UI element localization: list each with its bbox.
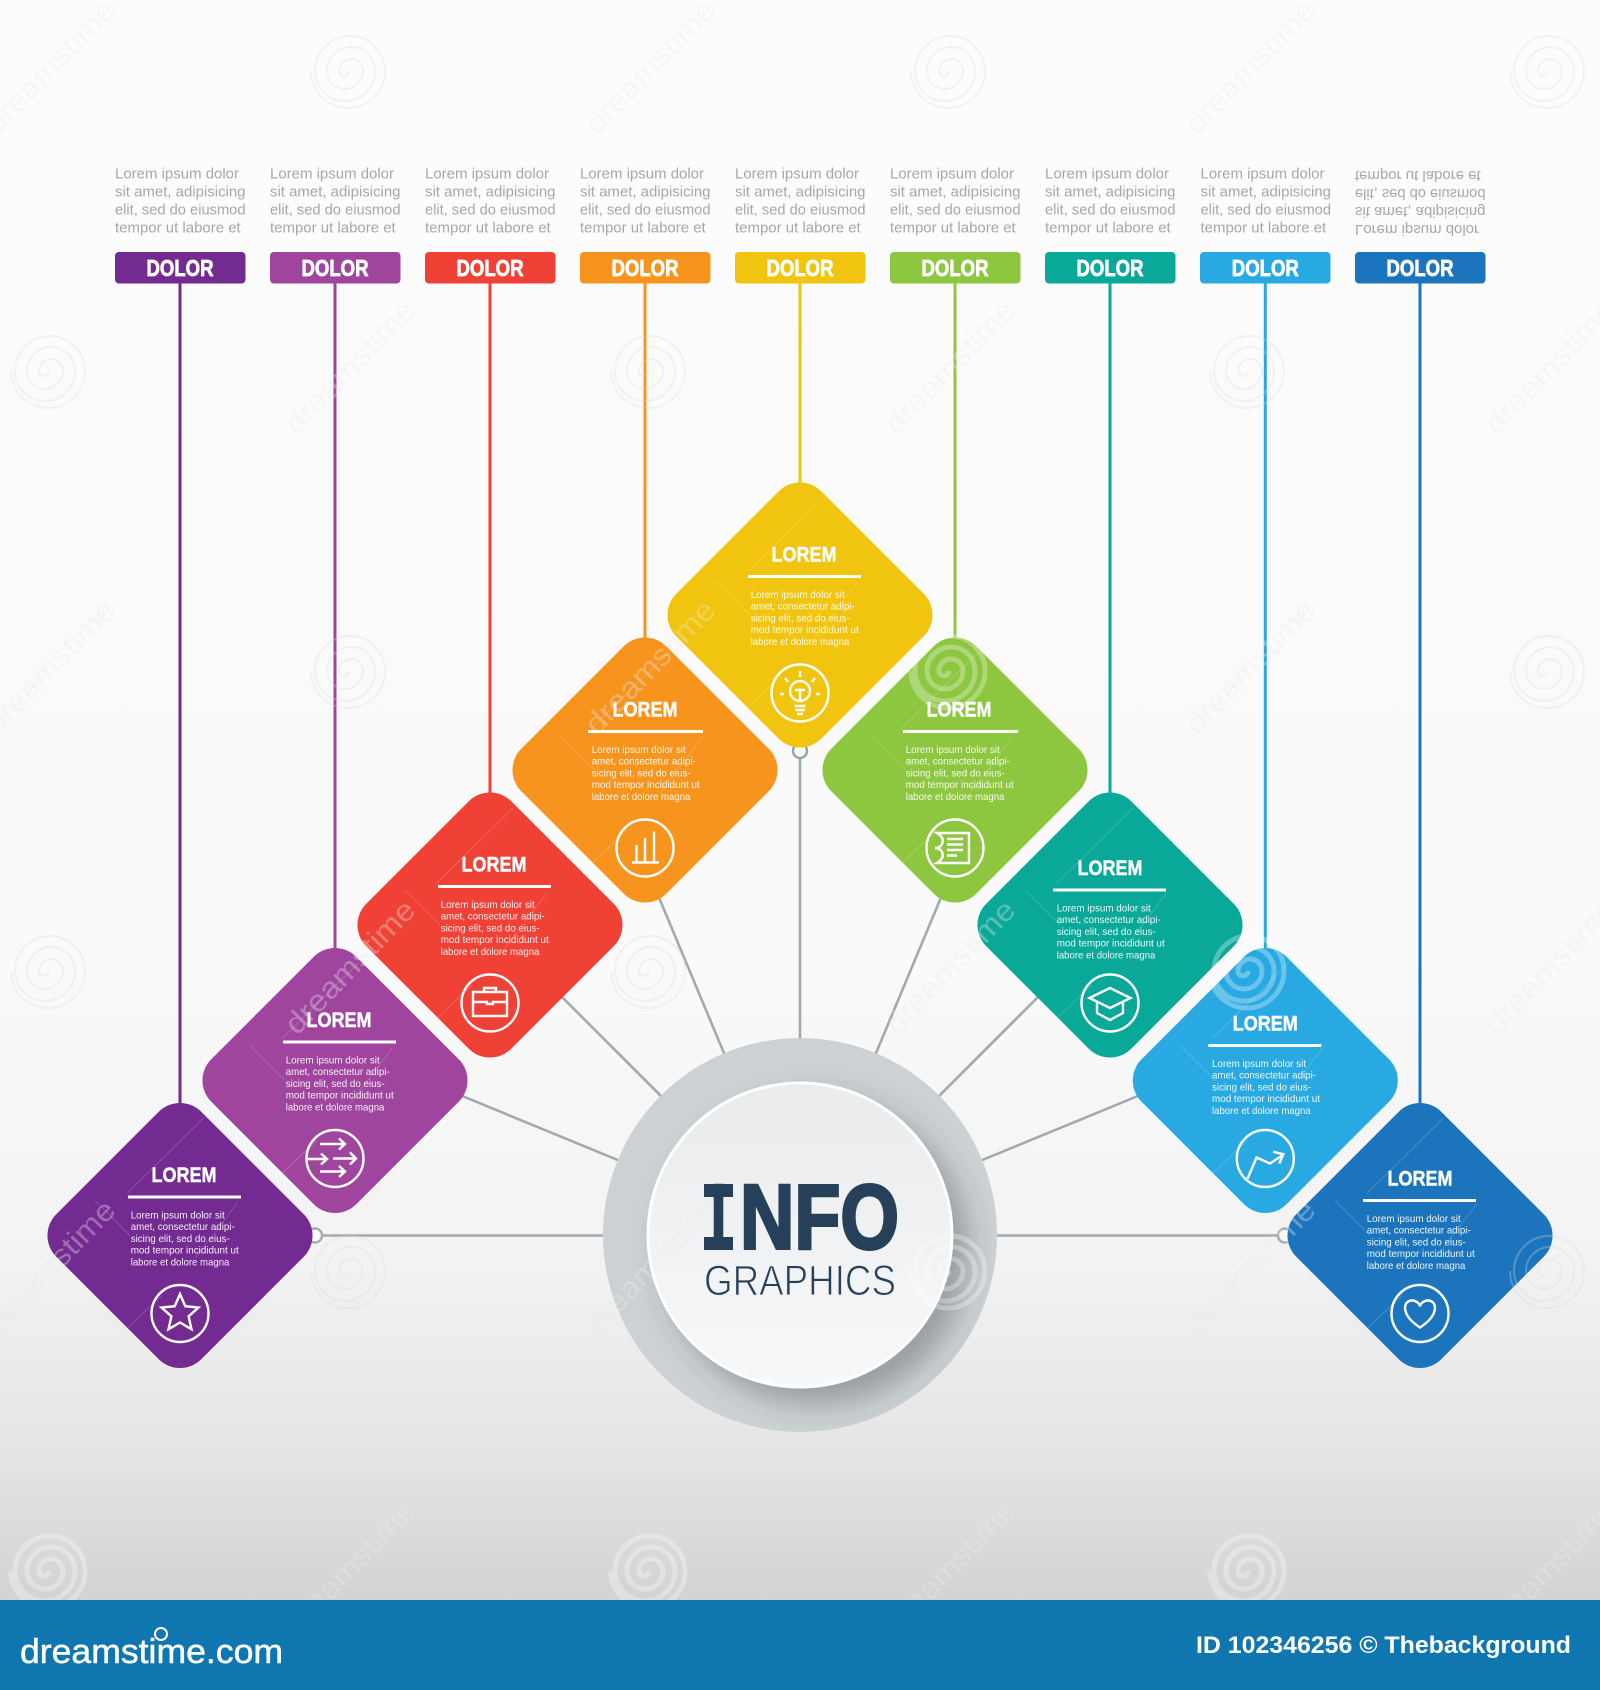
- watermark text: dreamstime: [278, 1494, 422, 1641]
- label: DOLOR: [1076, 255, 1144, 281]
- body text: Lorem ipsum dolor sit: [906, 744, 1000, 756]
- body text: amet, consectetur adipi-: [592, 756, 696, 768]
- body text: labore et dolore magna: [1057, 950, 1156, 962]
- body text: labore et dolore magna: [131, 1256, 230, 1268]
- panel: red diamond: [345, 780, 635, 1070]
- body text: amet, consectetur adipi-: [441, 911, 545, 923]
- top text: elit, sed do eiusmod: [890, 202, 1020, 218]
- top text: tempor ut labore et: [1200, 220, 1326, 236]
- body text: sicing elit, sed do eius-: [906, 767, 1005, 779]
- footer credit: ID 102346256 © Thebackground: [1196, 1632, 1571, 1659]
- top text: sit amet, adipisicing: [890, 184, 1020, 200]
- top text: sit amet, adipisicing: [115, 184, 246, 200]
- watermark text: dreamstime: [878, 894, 1022, 1041]
- body text: sicing elit, sed do eius-: [1212, 1081, 1311, 1093]
- top text: Lorem ipsum dolor: [735, 166, 859, 182]
- top text: elit, sed do eiusmod: [735, 202, 866, 218]
- label: DOLOR: [302, 255, 369, 281]
- body text: sicing elit, sed do eius-: [1367, 1236, 1466, 1248]
- column 8: sky blue: [1200, 166, 1331, 953]
- top text: sit amet, adipisicing: [735, 184, 866, 200]
- stem: [334, 283, 336, 953]
- body text: mod tempor incididunt ut: [1367, 1248, 1475, 1260]
- panel: sky blue diamond: [1120, 936, 1410, 1225]
- body text: mod tempor incididunt ut: [1212, 1093, 1320, 1105]
- icon: bar chart: [616, 820, 674, 876]
- label: [1045, 252, 1176, 284]
- body text: labore et dolore magna: [751, 636, 850, 648]
- stem: [1108, 283, 1112, 798]
- watermark text: dreamstime: [878, 1494, 1022, 1641]
- watermark text: dreamstime: [278, 294, 422, 441]
- connector dot top: [793, 744, 807, 758]
- top text: sit amet, adipisicing: [270, 184, 400, 200]
- top text: Lorem ipsum dolor: [115, 166, 239, 182]
- connector lines to center: [300, 740, 1300, 1236]
- body text: amet, consectetur adipi-: [286, 1066, 390, 1078]
- icon: heart: [1392, 1285, 1448, 1342]
- body text: labore et dolore magna: [906, 791, 1005, 803]
- top text: elit, sed do eiusmod: [580, 202, 710, 218]
- label: DOLOR: [922, 255, 989, 281]
- body text: amet, consectetur adipi-: [906, 756, 1010, 768]
- icon: growth arrow: [1237, 1130, 1294, 1187]
- top text: Lorem ipsum dolor: [1200, 166, 1325, 182]
- icon: briefcase: [462, 974, 518, 1032]
- title: INFO: NFO: [740, 1166, 899, 1268]
- body text: mod tempor incididunt ut: [751, 624, 859, 636]
- icon: light bulb: [772, 664, 828, 722]
- body text: labore et dolore magna: [1367, 1260, 1466, 1272]
- label: [735, 252, 866, 284]
- watermark text: dreamstime: [278, 894, 422, 1041]
- top text: sit amet, adipisicing: [1200, 184, 1331, 200]
- label: DOLOR: [612, 255, 679, 281]
- top text: Lorem ipsum dolor: [425, 166, 549, 182]
- panel: green diamond: [810, 625, 1100, 915]
- watermark text: dreamstime: [878, 294, 1022, 441]
- body text: Lorem ipsum dolor sit: [131, 1210, 225, 1222]
- body text: amet, consectetur adipi-: [751, 601, 855, 613]
- label: [1355, 252, 1486, 284]
- top text: tempor ut labore et: [270, 220, 396, 236]
- footer bar: [0, 1600, 1600, 1690]
- body text: sicing elit, sed do eius-: [1057, 926, 1156, 938]
- column 5: yellow: [735, 166, 866, 488]
- flipped top text: elit, sed do eiusmod: [1355, 185, 1486, 201]
- top text: Lorem ipsum dolor: [270, 166, 394, 182]
- flipped top text: sit amet, adipisicing: [1355, 203, 1486, 219]
- body text: mod tempor incididunt ut: [131, 1245, 239, 1257]
- body text: labore et dolore magna: [441, 946, 540, 958]
- stem: [1418, 283, 1422, 1108]
- title: GRAPHICS: GRAPHICS: [704, 1257, 896, 1305]
- label: [270, 252, 400, 284]
- watermark text: dreamstime: [1178, 1194, 1322, 1341]
- body text: amet, consectetur adipi-: [131, 1221, 235, 1233]
- heading: LOREM: [1388, 1166, 1452, 1190]
- panel: purple diamond: [35, 1091, 325, 1380]
- heading: LOREM: [152, 1163, 216, 1187]
- stem: [954, 283, 956, 643]
- stem: [178, 283, 182, 1108]
- label: DOLOR: [1386, 255, 1454, 281]
- top text: elit, sed do eiusmod: [270, 202, 400, 218]
- label: [1200, 252, 1330, 284]
- icon: graduation cap: [1082, 974, 1138, 1032]
- watermark text: dreamstime: [578, 1194, 722, 1341]
- watermark text: dreamstime: [578, 0, 722, 141]
- connector dot right: [1278, 1228, 1292, 1242]
- connector dot left: [308, 1228, 322, 1242]
- body text: sicing elit, sed do eius-: [286, 1078, 385, 1090]
- label: [580, 252, 710, 284]
- column 1: purple: [115, 166, 246, 1108]
- top text: Lorem ipsum dolor: [580, 166, 704, 182]
- top text: elit, sed do eiusmod: [1045, 202, 1176, 218]
- body text: Lorem ipsum dolor sit: [1057, 902, 1151, 914]
- top text: tempor ut labore et: [580, 220, 706, 236]
- body text: mod tempor incididunt ut: [286, 1090, 394, 1102]
- watermark text: dreamstime: [1178, 0, 1322, 141]
- column 9: blue: [1355, 167, 1486, 1108]
- body text: sicing elit, sed do eius-: [441, 922, 540, 934]
- top text: elit, sed do eiusmod: [1200, 202, 1331, 218]
- body text: Lorem ipsum dolor sit: [286, 1054, 380, 1066]
- panel: orange diamond: [500, 625, 790, 915]
- footer logo spiral: [155, 1628, 167, 1640]
- body text: Lorem ipsum dolor sit: [441, 899, 535, 911]
- top text: elit, sed do eiusmod: [115, 202, 246, 218]
- flipped top text: tempor ut labore et: [1355, 167, 1481, 183]
- icon: arrows: [306, 1130, 364, 1187]
- column 2: violet: [270, 166, 400, 953]
- top text: sit amet, adipisicing: [580, 184, 710, 200]
- center circle: [603, 1038, 997, 1432]
- label: DOLOR: [456, 255, 524, 281]
- column 4: orange: [580, 166, 710, 643]
- watermark text: dreamstime: [1178, 594, 1322, 741]
- body text: mod tempor incididunt ut: [906, 779, 1014, 791]
- stem: [1264, 283, 1267, 953]
- body text: Lorem ipsum dolor sit: [592, 744, 686, 756]
- stem: [488, 283, 492, 798]
- panel: yellow diamond: [655, 470, 945, 760]
- footer logo: dreamstime.com: [20, 1633, 283, 1671]
- heading: LOREM: [612, 698, 678, 722]
- body text: sicing elit, sed do eius-: [592, 767, 691, 779]
- body text: amet, consectetur adipi-: [1212, 1070, 1316, 1082]
- label: DOLOR: [146, 255, 214, 281]
- column 7: teal: [1045, 166, 1176, 798]
- body text: Lorem ipsum dolor sit: [1367, 1213, 1461, 1225]
- icon: document scroll: [926, 820, 984, 876]
- heading: LOREM: [462, 853, 526, 877]
- panel: violet diamond: [190, 936, 480, 1225]
- top text: tempor ut labore et: [735, 220, 861, 236]
- top text: Lorem ipsum dolor: [1045, 166, 1169, 182]
- label: DOLOR: [766, 255, 834, 281]
- body text: Lorem ipsum dolor sit: [1212, 1058, 1306, 1070]
- label: [425, 252, 556, 284]
- top text: elit, sed do eiusmod: [425, 202, 556, 218]
- icon: star: [152, 1285, 208, 1342]
- watermark text: dreamstime: [578, 594, 722, 741]
- top text: sit amet, adipisicing: [1045, 184, 1176, 200]
- panel: blue diamond: [1275, 1091, 1565, 1380]
- heading: LOREM: [1078, 856, 1142, 880]
- heading: LOREM: [926, 698, 992, 722]
- label: [890, 252, 1020, 284]
- top text: tempor ut labore et: [1045, 220, 1171, 236]
- stem: [644, 283, 646, 643]
- panel: teal diamond: [965, 780, 1255, 1070]
- I slab top: [704, 1184, 733, 1197]
- title: INFO: I: [711, 1166, 726, 1268]
- stem: [798, 283, 802, 488]
- top text: Lorem ipsum dolor: [890, 166, 1014, 182]
- flipped top text: Lorem ipsum dolor: [1355, 221, 1479, 237]
- label: DOLOR: [1232, 255, 1299, 281]
- body text: mod tempor incididunt ut: [1057, 938, 1165, 950]
- heading: LOREM: [772, 543, 836, 567]
- body text: mod tempor incididunt ut: [592, 779, 700, 791]
- body text: Lorem ipsum dolor sit: [751, 589, 845, 601]
- body text: sicing elit, sed do eius-: [131, 1233, 230, 1245]
- body text: labore et dolore magna: [592, 791, 691, 803]
- top text: sit amet, adipisicing: [425, 184, 556, 200]
- body text: labore et dolore magna: [1212, 1105, 1311, 1117]
- body text: amet, consectetur adipi-: [1367, 1225, 1471, 1237]
- top text: tempor ut labore et: [115, 220, 241, 236]
- label: [115, 252, 246, 284]
- column 3: red: [425, 166, 556, 798]
- body text: sicing elit, sed do eius-: [751, 612, 850, 624]
- I slab bottom: [704, 1237, 733, 1250]
- body text: mod tempor incididunt ut: [441, 934, 549, 946]
- column 6: green: [890, 166, 1020, 643]
- heading: LOREM: [1233, 1012, 1298, 1036]
- body text: labore et dolore magna: [286, 1102, 385, 1114]
- top text: tempor ut labore et: [890, 220, 1016, 236]
- body text: amet, consectetur adipi-: [1057, 914, 1161, 926]
- top text: tempor ut labore et: [425, 220, 551, 236]
- heading: LOREM: [306, 1008, 372, 1032]
